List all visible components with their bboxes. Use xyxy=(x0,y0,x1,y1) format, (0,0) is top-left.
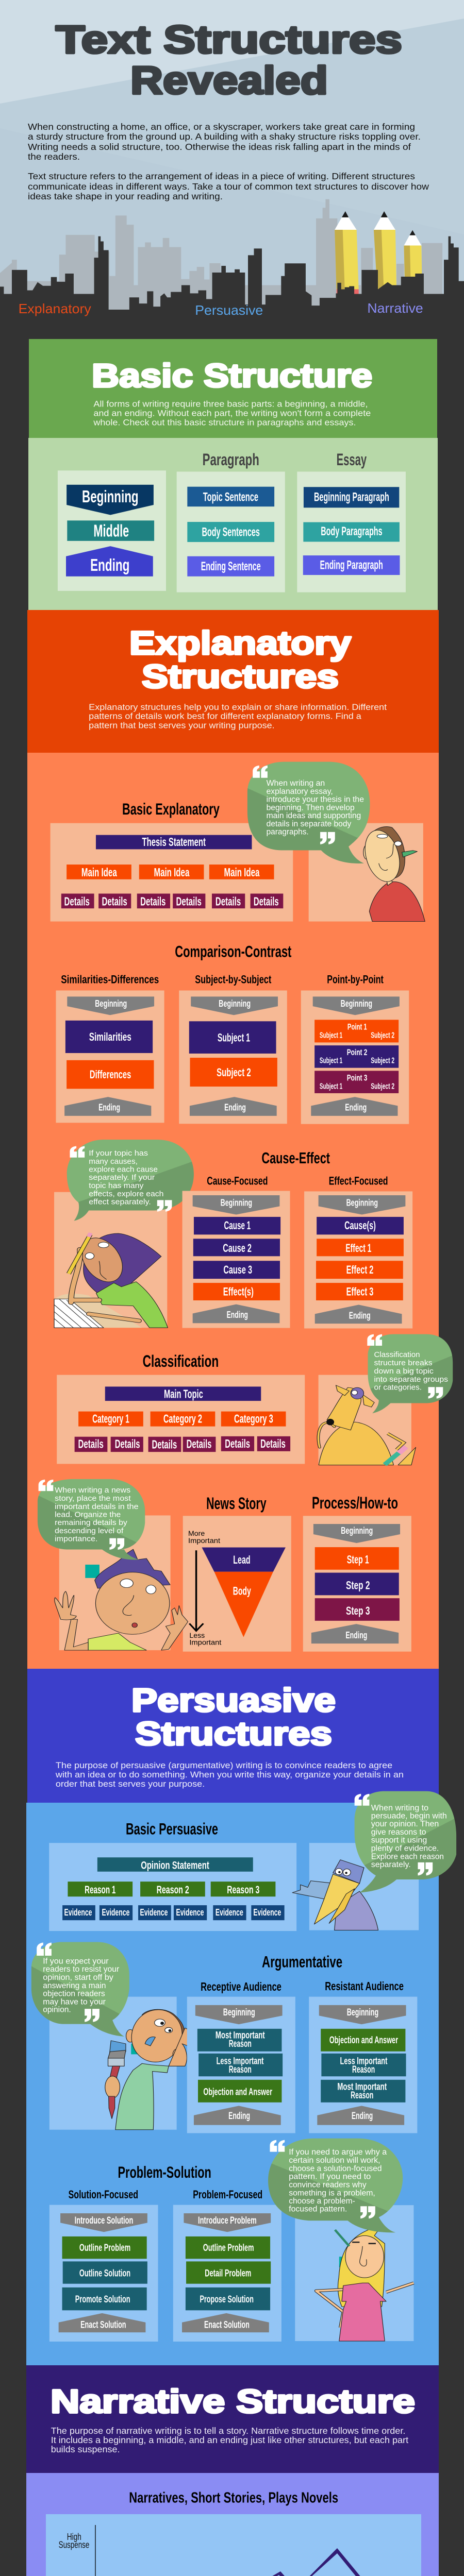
column: subject-by-subject: Subject-by-Subject xyxy=(195,974,271,986)
panel: persuasive structures xyxy=(26,1669,456,2365)
icon: pencil 1 xyxy=(335,211,359,295)
category details xyxy=(75,1436,290,1452)
inverted pyramid: Body xyxy=(233,1585,251,1598)
column: effect-focused xyxy=(304,1175,412,1328)
more important label: More xyxy=(188,1530,205,1538)
section: basic explanatory xyxy=(51,800,293,922)
character panel: crow xyxy=(292,1843,419,1930)
character panel: dog with pencil xyxy=(318,1375,416,1465)
inverted pyramid: Lead xyxy=(233,1554,251,1566)
heading: persuasive structures: Structures xyxy=(135,1715,332,1752)
section: argumentative: Argumentative xyxy=(262,1953,342,1971)
column: essay: Ending Paragraph xyxy=(320,558,383,572)
character panel: boy with pencil xyxy=(309,823,425,922)
speech bubble: argumentative tip: opinion. xyxy=(43,2006,71,2014)
explanatory description: Explanatory structures help you to explain or share information. Different xyxy=(89,702,387,712)
column: cause-focused: Cause-Focused xyxy=(207,1175,268,1188)
speech bubble: basic persuasive tip: plenty of evidence. xyxy=(371,1844,439,1853)
character panel: painter xyxy=(49,1997,192,2130)
speech bubble: news story tip xyxy=(38,1479,145,1560)
speech bubble: classification tip xyxy=(367,1334,453,1413)
details: Details xyxy=(102,895,127,908)
panel: header xyxy=(0,0,464,320)
less important label xyxy=(189,1632,222,1647)
chart: suspense plot line: Suspense xyxy=(59,2539,89,2550)
column: generic structure xyxy=(58,470,166,591)
column: receptive audience: Beginning xyxy=(223,2007,255,2018)
speech bubble: argumentative tip: readers to resist your xyxy=(43,1965,120,1974)
column: cause-focused xyxy=(183,1175,290,1328)
column: resistant audience: Beginning xyxy=(347,2007,378,2018)
panel: basic structure xyxy=(28,339,438,610)
speech bubble: news story tip: When writing a news xyxy=(55,1485,130,1495)
column: similarities-differences: Similarities xyxy=(89,1031,131,1043)
panel: narrative structure xyxy=(26,2365,439,2576)
persuasive description: with an idea or to do something. When you write this way, organize your details in an xyxy=(55,1770,404,1780)
speech bubble: basic explanatory tip: explanatory essay, xyxy=(267,787,333,795)
speech bubble: cause-effect tip: many causes, xyxy=(89,1157,138,1165)
intro text: Text structure refers to the arrangement of ideas in a piece of writing. Different structures xyxy=(28,171,415,181)
speech bubble: basic persuasive tip xyxy=(355,1791,456,1893)
column: solution-focused: Outline Solution xyxy=(79,2268,130,2279)
speech bubble: classification tip: down a big topic xyxy=(374,1366,434,1375)
basic structure description: whole. Check out this basic structure in paragraphs and essays. xyxy=(93,417,356,427)
column: similarities-differences: Beginning xyxy=(95,999,127,1009)
speech bubble: basic persuasive tip: persuade, begin with xyxy=(371,1812,447,1820)
less important label: Important xyxy=(189,1639,222,1647)
column: point-by-point: Point 1 xyxy=(347,1022,367,1031)
speech bubble: basic persuasive tip: separately. xyxy=(371,1860,411,1869)
basic structure description: and an ending. Without each part, the writing won't form a complete xyxy=(93,408,371,418)
column: receptive audience: Most Important xyxy=(216,2030,265,2041)
column: similarities-differences: Differences xyxy=(90,1069,131,1081)
column: point-by-point: Subject 1 xyxy=(320,1082,342,1091)
thesis statement xyxy=(96,835,252,849)
speech bubble: problem-solution tip: convince readers why xyxy=(289,2180,367,2189)
section: comparison-contrast xyxy=(56,942,409,1124)
persuasive description xyxy=(55,1760,404,1789)
speech bubble: cause-effect tip: effect separately. xyxy=(89,1197,151,1206)
details: Details xyxy=(254,895,279,908)
column: solution-focused: Solution-Focused xyxy=(69,2188,138,2201)
column: problem-focused: Outline Problem xyxy=(203,2242,254,2253)
column: essay: Body Paragraphs xyxy=(321,525,383,538)
speech bubble: basic persuasive tip: When writing to xyxy=(371,1804,428,1812)
column: effect-focused: Ending xyxy=(349,1310,371,1321)
label: narrative: Narrative xyxy=(367,301,423,316)
column: effect-focused: Effect 3 xyxy=(346,1286,373,1298)
section: classification xyxy=(57,1351,305,1464)
evidence xyxy=(62,1905,285,1920)
column: effect-focused: Effect-Focused xyxy=(329,1175,388,1188)
column: resistant audience: Resistant Audience xyxy=(325,1979,404,1993)
speech bubble: problem-solution tip: choose a solution-focused xyxy=(289,2164,382,2173)
evidence: Evidence xyxy=(102,1907,129,1918)
column: solution-focused: Outline Problem xyxy=(79,2242,130,2253)
evidence: Evidence xyxy=(140,1907,168,1918)
speech bubble: argumentative tip: objection readers xyxy=(43,1989,105,1998)
arrow: importance xyxy=(189,1550,203,1631)
column: point-by-point: Point 3 xyxy=(347,1073,367,1082)
speech bubble: argumentative tip: may have to your xyxy=(43,1997,106,2006)
column: subject-by-subject: Subject 2 xyxy=(217,1066,251,1079)
speech bubble: classification tip: structure breaks xyxy=(374,1358,433,1367)
column: receptive audience: Reason xyxy=(229,2064,252,2075)
main ideas: Main Idea xyxy=(154,866,190,879)
column: resistant audience: Reason xyxy=(351,2090,373,2101)
column: point-by-point: Subject 1 xyxy=(320,1056,342,1065)
section: process how-to: Step 2 xyxy=(346,1579,370,1591)
column: resistant audience: Most Important xyxy=(337,2081,387,2092)
section: process how-to xyxy=(303,1494,411,1652)
category details: Details xyxy=(225,1437,250,1450)
speech bubble: news story tip: important details in the xyxy=(55,1502,139,1511)
ending arrow: Ending xyxy=(90,556,129,575)
section: process how-to: Beginning xyxy=(341,1525,373,1536)
column: point-by-point: Ending xyxy=(345,1103,367,1113)
details: Details xyxy=(140,895,165,908)
column: receptive audience: Less Important xyxy=(217,2056,264,2066)
speech bubble: problem-solution tip: If you need to argue why a xyxy=(289,2148,387,2157)
column: paragraph xyxy=(177,451,285,592)
column: essay: Essay xyxy=(337,451,367,469)
column: effect-focused: Beginning xyxy=(346,1197,378,1208)
more important label xyxy=(188,1530,221,1545)
speech bubble: argumentative tip: answering a main xyxy=(43,1981,106,1990)
speech bubble: basic explanatory tip: When writing an xyxy=(267,778,325,788)
column: receptive audience: Reason xyxy=(229,2038,252,2049)
speech bubble: basic explanatory tip xyxy=(247,762,370,863)
opinion statement xyxy=(97,1857,253,1872)
less important label: Less xyxy=(189,1632,205,1639)
column: problem-focused: Problem-Focused xyxy=(193,2188,262,2201)
basic structure description xyxy=(93,399,371,427)
title xyxy=(56,18,402,103)
speech bubble: news story tip: descending level of xyxy=(55,1526,123,1535)
title: Text Structures xyxy=(56,18,402,62)
speech bubble: news story tip: lead. Organize the xyxy=(55,1510,121,1519)
column: effect-focused: Cause(s) xyxy=(344,1219,376,1232)
section: argumentative xyxy=(187,1953,417,2133)
narrative description xyxy=(51,2426,408,2454)
column: paragraph: Ending Sentence xyxy=(201,560,261,573)
column: subject-by-subject: Subject 1 xyxy=(218,1031,250,1044)
column: problem-focused: Enact Solution xyxy=(204,2319,250,2330)
persuasive description: The purpose of persuasive (argumentative) writing is to convince readers to agree xyxy=(56,1760,392,1770)
skyline and pencils xyxy=(0,199,464,320)
speech bubble: basic explanatory tip: details in separate body xyxy=(267,819,352,828)
column: point-by-point: Subject 2 xyxy=(371,1056,394,1065)
persuasive description: order that best serves your purpose. xyxy=(56,1779,205,1789)
speech bubble: problem-solution tip: something is a problem, xyxy=(289,2189,375,2197)
column: point-by-point: Point-by-Point xyxy=(327,974,384,986)
column: resistant audience xyxy=(309,1979,417,2133)
section: basic explanatory: Basic Explanatory xyxy=(122,800,220,818)
column: solution-focused: Enact Solution xyxy=(80,2319,126,2330)
column: solution-focused xyxy=(49,2188,158,2342)
label: persuasive: Persuasive xyxy=(195,303,263,318)
column: subject-by-subject: Beginning xyxy=(219,999,251,1009)
evidence: Evidence xyxy=(176,1907,204,1918)
speech bubble: basic persuasive tip: give reasons to xyxy=(371,1828,426,1837)
column: resistant audience: Less Important xyxy=(340,2056,387,2066)
section: process how-to: Ending xyxy=(345,1629,367,1640)
column: solution-focused: Introduce Solution xyxy=(75,2215,133,2226)
section: process how-to: Step 1 xyxy=(347,1554,369,1566)
details: Details xyxy=(216,895,241,908)
icon: pencil 3 xyxy=(404,230,422,283)
intro text: the readers. xyxy=(28,151,80,162)
reasons: Reason 3 xyxy=(227,1883,259,1896)
speech bubble: argumentative tip: opinion, start off by xyxy=(43,1973,114,1982)
opinion statement: Opinion Statement xyxy=(141,1859,209,1871)
character panel: girl with pencil xyxy=(54,1192,168,1328)
column: essay: Beginning Paragraph xyxy=(314,490,389,504)
reasons: Reason 1 xyxy=(85,1883,116,1896)
intro text: a sturdy structure from the ground up. A building with a shaky structure risks toppling over. xyxy=(28,131,421,142)
column: point-by-point: Point 2 xyxy=(347,1047,367,1057)
section: classification: Classification xyxy=(143,1351,219,1370)
column: receptive audience xyxy=(187,1980,295,2133)
label: explanatory: Explanatory xyxy=(19,301,91,316)
section: comparison-contrast: Comparison-Contrast xyxy=(175,942,292,961)
category details: Details xyxy=(115,1437,140,1451)
section: news story xyxy=(183,1494,291,1652)
heading: narrative structure: Narrative Structure xyxy=(51,2383,415,2420)
beginning arrow: Beginning xyxy=(82,487,139,506)
category details: Details xyxy=(260,1437,286,1450)
evidence: Evidence xyxy=(64,1907,92,1918)
speech bubble: news story tip: remaining details by xyxy=(55,1518,127,1527)
categories: Category 3 xyxy=(234,1412,273,1426)
speech bubble: cause-effect tip: explore each cause xyxy=(89,1165,158,1174)
character panel: surprised boy xyxy=(55,1515,188,1650)
column: essay xyxy=(297,451,406,592)
column: resistant audience: Objection and Answer xyxy=(329,2035,398,2046)
section: problem-solution xyxy=(49,2164,281,2342)
speech bubble: argumentative tip xyxy=(31,1942,129,2037)
middle block: Middle xyxy=(93,522,129,541)
category details: Details xyxy=(152,1438,177,1451)
speech bubble: problem-solution tip: certain solution will work, xyxy=(289,2156,380,2165)
main topic xyxy=(105,1386,261,1401)
column: effect-focused: Effect 1 xyxy=(345,1242,371,1255)
ending arrow xyxy=(66,546,153,577)
speech bubble: problem-solution tip: focused pattern. xyxy=(289,2205,347,2213)
heading: basic persuasive: Basic Persuasive xyxy=(126,1820,218,1838)
speech bubble: cause-effect tip: separately. If your xyxy=(89,1173,155,1182)
title: Revealed xyxy=(130,59,328,103)
heading: basic structure: Basic Structure xyxy=(92,357,372,394)
heading: explanatory structures xyxy=(129,624,351,695)
middle block xyxy=(67,520,154,541)
panel: explanatory structures xyxy=(27,610,453,1669)
heading: explanatory structures: Structures xyxy=(142,658,339,695)
details xyxy=(61,893,283,908)
speech bubble: problem-solution tip: pattern. If you need to xyxy=(289,2173,371,2181)
section: cause-effect xyxy=(183,1149,412,1328)
column: receptive audience: Ending xyxy=(228,2110,250,2122)
column: subject-by-subject xyxy=(179,974,287,1124)
intro text: Writing needs a solid structure, too. Otherwise the ideas risk falling apart in the minds of xyxy=(28,142,411,152)
speech bubble: basic persuasive tip: your opinion. Then xyxy=(371,1820,439,1828)
basic structure description: All forms of writing require three basic parts: a beginning, a middle, xyxy=(93,399,368,409)
speech bubble: basic persuasive tip: support it using xyxy=(371,1836,427,1844)
speech bubble: basic explanatory tip: paragraphs. xyxy=(267,827,309,836)
column: point-by-point: Subject 2 xyxy=(371,1031,394,1040)
intro text xyxy=(28,122,429,201)
column: solution-focused: Promote Solution xyxy=(75,2294,130,2305)
column: similarities-differences: Ending xyxy=(98,1103,120,1113)
thesis statement: Thesis Statement xyxy=(142,836,206,849)
column: problem-focused: Propose Solution xyxy=(200,2294,254,2305)
section: basic persuasive diagram xyxy=(49,1843,296,1931)
speech bubble: problem-solution tip xyxy=(268,2139,403,2232)
beginning arrow xyxy=(67,485,154,515)
column: similarities-differences: Similarities-Differences xyxy=(61,974,159,986)
column: cause-focused: Cause 1 xyxy=(224,1219,251,1232)
category details: Details xyxy=(78,1437,104,1451)
column: cause-focused: Cause 3 xyxy=(223,1264,252,1276)
categories xyxy=(78,1412,286,1427)
details: Details xyxy=(64,895,90,908)
evidence: Evidence xyxy=(216,1907,243,1918)
column: point-by-point xyxy=(301,974,409,1124)
column: point-by-point: Subject 1 xyxy=(320,1031,342,1040)
speech bubble: cause-effect tip: If your topic has xyxy=(89,1148,148,1158)
speech bubble: classification tip: Classification xyxy=(374,1350,420,1359)
column: point-by-point: Beginning xyxy=(341,999,372,1009)
column: effect-focused: Effect 2 xyxy=(346,1264,373,1276)
reasons: Reason 2 xyxy=(157,1883,189,1896)
column: cause-focused: Effect(s) xyxy=(223,1286,254,1298)
main topic: Main Topic xyxy=(164,1387,203,1400)
speech bubble: basic persuasive tip: Explore each reason xyxy=(371,1852,444,1861)
evidence: Evidence xyxy=(253,1907,281,1918)
explanatory description: pattern that best serves your writing purpose. xyxy=(89,720,275,731)
column: resistant audience: Reason xyxy=(352,2064,375,2075)
categories: Category 1 xyxy=(92,1412,129,1426)
section: problem-solution: Problem-Solution xyxy=(118,2164,211,2182)
speech bubble: news story tip: importance. xyxy=(55,1534,97,1543)
main ideas: Main Idea xyxy=(224,866,260,879)
speech bubble: cause-effect tip: topic has many xyxy=(89,1181,144,1190)
column: cause-focused: Beginning xyxy=(221,1197,252,1208)
column: problem-focused: Introduce Problem xyxy=(198,2215,257,2226)
column: point-by-point: Subject 2 xyxy=(371,1082,394,1091)
speech bubble: cause-effect tip xyxy=(67,1140,194,1221)
heading: persuasive structures xyxy=(131,1682,336,1752)
speech bubble: news story tip: story, place the most xyxy=(55,1494,131,1502)
speech bubble: argumentative tip: If you expect your xyxy=(43,1957,109,1965)
category details: Details xyxy=(187,1437,211,1451)
column: paragraph: Paragraph xyxy=(203,451,259,469)
speech bubble: problem-solution tip: choose a problem- xyxy=(289,2197,355,2206)
column: receptive audience: Receptive Audience xyxy=(201,1980,281,1994)
explanatory description xyxy=(89,702,387,731)
heading: persuasive structures: Persuasive xyxy=(131,1682,336,1719)
main ideas: Main Idea xyxy=(81,866,117,879)
intro text: ideas take shape in your reading and writing. xyxy=(28,191,223,201)
more important label: Important xyxy=(188,1537,221,1545)
speech bubble: basic explanatory tip: introduce your thesis in the xyxy=(267,795,364,804)
section: cause-effect: Cause-Effect xyxy=(261,1149,330,1167)
column: problem-focused: Detail Problem xyxy=(205,2268,251,2279)
column: paragraph: Topic Sentence xyxy=(203,490,258,504)
column: subject-by-subject: Ending xyxy=(224,1103,246,1113)
axis label: high suspense: High xyxy=(67,2532,81,2542)
intro text: When constructing a home, an office, or a skyscraper, workers take great care in forming xyxy=(28,122,415,132)
reasons xyxy=(68,1882,275,1896)
column: paragraph: Body Sentences xyxy=(202,526,260,539)
speech bubble: cause-effect tip: effects, explore each xyxy=(89,1189,163,1198)
inverted pyramid xyxy=(202,1547,286,1637)
intro text: communicate ideas in different ways. Take a tour of common text structures to discover how xyxy=(28,181,429,192)
section: process how-to: Step 3 xyxy=(346,1605,370,1617)
speech bubble: basic explanatory tip: main ideas and supporting xyxy=(267,811,361,820)
column: similarities-differences xyxy=(56,974,164,1123)
explanatory description: patterns of details work best for different explanatory forms. Find a xyxy=(89,711,361,721)
heading: explanatory structures: Explanatory xyxy=(129,624,351,662)
details: Details xyxy=(176,895,202,908)
character panel: blonde girl xyxy=(295,2205,413,2341)
categories: Category 2 xyxy=(163,1412,202,1426)
column: receptive audience: Objection and Answer xyxy=(203,2087,272,2097)
axis label: high suspense xyxy=(59,2532,89,2550)
speech bubble: basic explanatory tip: beginning. Then develop xyxy=(267,803,355,812)
column: resistant audience: Ending xyxy=(352,2110,373,2122)
chart: suspense plot line xyxy=(46,2514,421,2576)
main ideas xyxy=(67,865,274,879)
column: problem-focused xyxy=(173,2188,281,2342)
section: news story: News Story xyxy=(206,1494,267,1513)
icon: pencil 2 xyxy=(374,211,396,290)
speech bubble: classification tip: into separate groups xyxy=(374,1375,448,1383)
narrative description: builds suspense. xyxy=(51,2444,120,2454)
speech bubble: classification tip: or categories. xyxy=(374,1383,422,1392)
column: cause-focused: Cause 2 xyxy=(223,1242,252,1255)
column: cause-focused: Ending xyxy=(227,1309,248,1320)
